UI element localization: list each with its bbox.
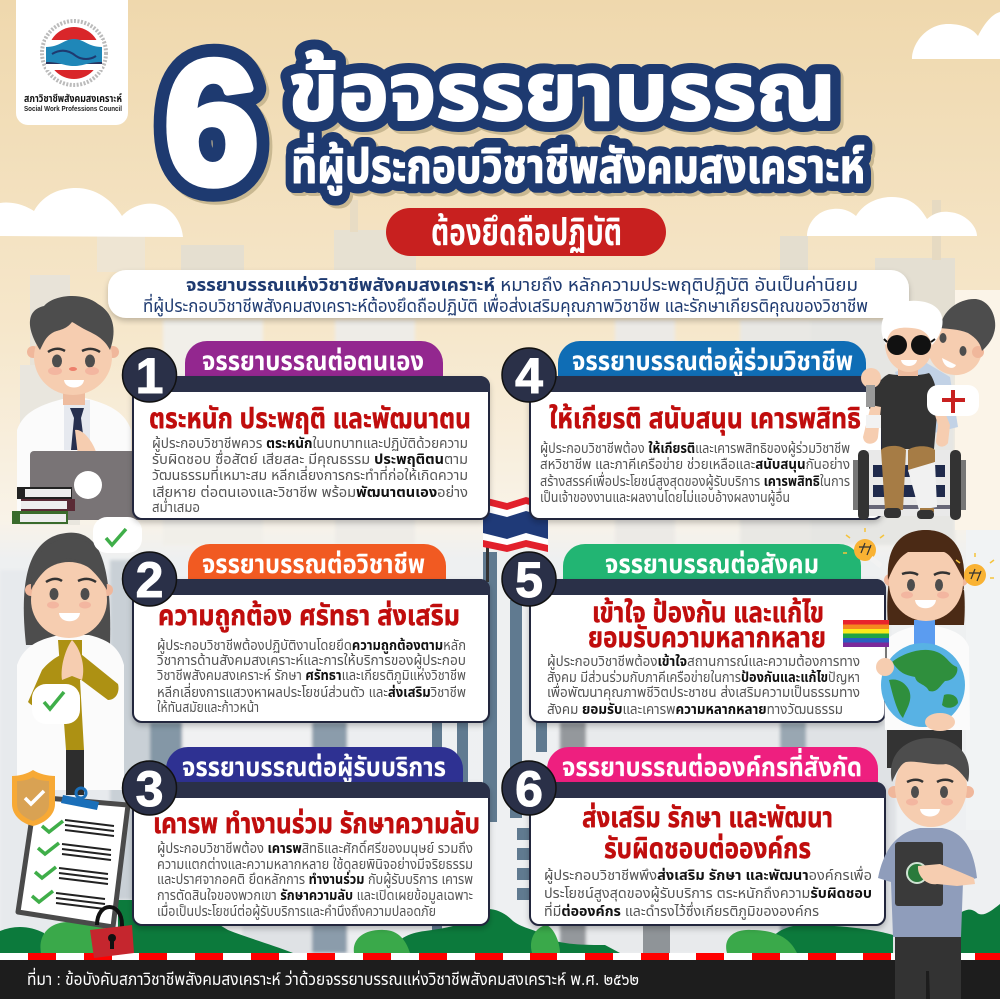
logo card: [16, 0, 128, 125]
tab heading: จรรยาบรรณต่อผู้รับบริการ: [182, 752, 446, 783]
wheelchair: [853, 460, 859, 510]
icon: medical cross badge: [927, 385, 979, 416]
icon: lightbulb left: [843, 528, 884, 566]
card text: สังคม ยอมรับและเคารพความหลากหลายทางวัฒนธรรม: [547, 701, 843, 717]
card text: ความแตกต่างและความหลากหลาย ใช้ดุลยพินิจอย่างมีจริยธรรม: [157, 856, 473, 873]
card 6: [502, 747, 886, 925]
intro line 1: จรรยาบรรณแห่งวิชาชีพสังคมสงเคราะห์ หมายถึง หลักความประพฤติปฏิบัติ อันเป็นค่านิยม: [186, 275, 858, 295]
tablet: [895, 842, 952, 906]
subtitle pill: [386, 208, 666, 256]
icon: shield: [12, 770, 55, 826]
tab heading: จรรยาบรรณต่อองค์กรที่สังกัด: [562, 748, 862, 782]
card text: สม่ำเสมอ: [152, 497, 200, 515]
card text: [547, 653, 860, 717]
tab heading: จรรยาบรรณต่อผู้ร่วมวิชาชีพ: [572, 346, 853, 377]
card title: ให้เกียรติ สนับสนุน เคารพสิทธิ: [549, 403, 861, 435]
card text: [157, 840, 473, 920]
card title line 1: ส่งเสริม รักษา และพัฒนา: [582, 802, 833, 833]
intro box: [108, 270, 909, 318]
card text: [544, 865, 872, 920]
card text: เสียหาย ต่อตนเองและวิชาชีพ พร้อม พัฒนาตนเองอย่าง: [152, 484, 468, 500]
source text: ที่มา : ข้อบังคับสภาวิชาชีพสังคมสงเคราะห์ ว่าด้วยจรรยาบรรณแห่งวิชาชีพสังคมสงเคราะห์ พ.ศ. ๒๕๖๒: [27, 967, 639, 989]
header bar: [530, 579, 886, 595]
clouds: [0, 12, 1000, 237]
icon: clipboard checklist: [18, 788, 128, 927]
caretaker: [895, 299, 995, 437]
title line 1 outline: ข้อจรรยาบรรณ: [288, 47, 836, 138]
card title: เคารพ ทำงานร่วม รักษาความลับ: [153, 808, 480, 839]
body panel: [133, 377, 489, 519]
card text: หลีกเลี่ยงการแสวงหาผลประโยชน์ส่วนตัว และส่งเสริมวิชาชีพ: [157, 682, 466, 700]
card text: รับผิดชอบ ซื่อสัตย์ เสียสละ มีคุณธรรม ประพฤติตนตาม: [152, 449, 468, 468]
tab heading: จรรยาบรรณต่อตนเอง: [202, 346, 424, 376]
body panel: [530, 580, 885, 722]
number badge: [122, 761, 176, 817]
tab: [166, 747, 463, 782]
card title line 1: เข้าใจ ป้องกัน และแก้ไข: [592, 597, 824, 628]
card text: เพื่อพัฒนาคุณภาพชีวิตประชาชน ส่งเสริมความเป็นธรรมทาง: [547, 682, 860, 701]
card text: เมื่อเป็นประโยชน์ต่อผู้รับบริการและคำนึงถึงความปลอดภัย: [157, 901, 436, 920]
body panel: [133, 783, 489, 925]
tab: [188, 544, 446, 579]
header bar: [133, 579, 490, 595]
header bar: [133, 782, 490, 798]
card text: สร้างสรรค์เพื่อประโยชน์สูงสุดของผู้รับบริการ เคารพสิทธิในการ: [540, 471, 850, 490]
card text: ผู้ประกอบวิชาชีพพึง ส่งเสริม รักษา และพัฒนา องค์กรเพื่อ: [544, 865, 872, 884]
number badge: [502, 552, 556, 608]
icon: check bubble lower: [32, 684, 80, 724]
arms: [863, 405, 881, 444]
footer source bar: [0, 953, 1000, 999]
person: old man in wheelchair with caretaker: [853, 299, 995, 520]
number badge: [122, 348, 176, 404]
number badge: [502, 348, 556, 404]
body panel: [133, 580, 489, 722]
tab: [185, 341, 443, 376]
number badge: 6: [515, 761, 543, 817]
card text: ผู้ประกอบวิชาชีพต้อง เคารพสิทธิและศักดิ์ศรีของมนุษย์ รวมถึง: [157, 840, 473, 857]
card text: [152, 435, 468, 515]
person: man with laptop: [12, 296, 147, 524]
number badge: 1: [136, 348, 163, 404]
number badge: [502, 761, 556, 817]
number badge: 2: [136, 552, 163, 608]
books: [12, 487, 75, 524]
header bar: [133, 376, 490, 392]
card title: ตระหนัก ประพฤติ และพัฒนาตน: [149, 403, 471, 434]
person: woman holding globe: [843, 528, 994, 768]
card text: ที่มีต่อองค์กร และดำรงไว้ซึ่งเกียรติภูมิขององค์กร: [544, 901, 819, 920]
card text: ผู้ประกอบวิชาชีพต้อง ให้เกียรติและเคารพสิทธิของผู้ร่วมวิชาชีพ: [540, 440, 850, 457]
icon: padlock: [90, 907, 134, 958]
card text: วิชาการด้านสังคมสงเคราะห์และการให้บริการของผู้ประกอบ: [156, 652, 466, 669]
card text: ผู้ประกอบวิชาชีพต้องเข้าใจสถานการณ์และความต้องการทาง: [547, 653, 860, 670]
card title: ความถูกต้อง ศรัทธา ส่งเสริม: [158, 600, 460, 633]
body panel: [530, 377, 882, 519]
card title line 2: รับผิดชอบต่อองค์กร: [604, 833, 811, 864]
number badge: 5: [515, 552, 543, 608]
card 1: [122, 341, 490, 519]
logo text Thai: สภาวิชาชีพสังคมสงเคราะห์: [24, 93, 122, 105]
card 4: [502, 341, 883, 519]
card text: และปราศจากอคติ ยึดหลักการ ทำงานร่วม กับผู้รับบริการ เคารพ: [157, 871, 473, 888]
title line 2 outline: ที่ผู้ประกอบวิชาชีพสังคมสงเคราะห์: [291, 133, 865, 196]
card text: วิชาชีพสังคมสงเคราะห์ รักษา ศรัทธาและเกียรติภูมิแห่งวิชาชีพ: [156, 667, 466, 684]
card text: สังคม มีส่วนร่วมกับภาคีเครือข่ายในการป้องกันและแก้ไขปัญหา: [547, 669, 860, 685]
card text: เป็นเจ้าของงานและผลงานโดยไม่แอบอ้างผลงานผู้อื่น: [540, 487, 790, 506]
icon: thai flag: [483, 497, 548, 582]
subtitle pill: ต้องยึดถือปฏิบัติ: [431, 212, 622, 253]
icon: lightbulb right: [956, 553, 994, 591]
tab heading: จรรยาบรรณต่อสังคม: [605, 549, 819, 579]
tab: [558, 341, 866, 376]
card title line 2: ยอมรับความหลากหลาย: [588, 622, 826, 653]
title line 2: ที่ผู้ประกอบวิชาชีพสังคมสงเคราะห์: [291, 133, 865, 196]
number badge: [122, 552, 176, 608]
card text: วัฒนธรรมที่เหมาะสม หลีกเลี่ยงการกระทำที่ก่อให้เกิดความ: [152, 465, 468, 483]
red and white dashes: [0, 953, 1000, 960]
header bar: [530, 782, 886, 798]
card 3: [122, 747, 490, 925]
tab: [563, 544, 861, 579]
laptop: [30, 451, 147, 520]
card text: การตัดสินใจของพวกเขา รักษาความลับ และเปิดเผยข้อมูลเฉพาะ: [157, 887, 473, 904]
icon: globe: [881, 643, 965, 727]
number badge: 4: [515, 348, 543, 404]
clip: [61, 795, 99, 810]
body panel: [530, 783, 885, 925]
card 2: [122, 544, 490, 722]
card text: ผู้ประกอบวิชาชีพต้องปฏิบัติงานโดยยึดความถูกต้องตามหลัก: [157, 637, 466, 655]
person: woman in namaste pose: [17, 517, 142, 795]
tab heading: จรรยาบรรณต่อวิชาชีพ: [202, 549, 425, 579]
icon: check bubble top: [93, 517, 142, 553]
card text: [156, 637, 466, 715]
card text: ประโยชน์สูงสุดของผู้รับบริการ ตระหนักถึงความ รับผิดชอบ: [544, 885, 872, 902]
head: [898, 362, 918, 376]
person: man with tablet: [878, 738, 977, 999]
title: [164, 26, 865, 221]
card text: ผู้ประกอบวิชาชีพควร ตระหนักในบทบาทและปฏิบัติด้วยความ: [152, 435, 468, 452]
intro line 2: ที่ผู้ประกอบวิชาชีพสังคมสงเคราะห์ต้องยึดถือปฏิบัติ เพื่อส่งเสริมคุณภาพวิชาชีพ และรักษาเกียรติคุณของวิชาชีพ: [143, 293, 868, 318]
big number 6 outline: 6: [164, 26, 259, 221]
number badge: 3: [136, 761, 163, 817]
body: [869, 373, 938, 449]
icon: rainbow flag: [843, 620, 889, 667]
card text: [540, 440, 850, 506]
title line 1: ข้อจรรยาบรรณ: [288, 47, 836, 138]
card text: ให้ทันสมัยและก้าวหน้า: [157, 699, 259, 715]
logo text English: Social Work Professions Council: [24, 104, 122, 113]
card 5: [502, 544, 886, 722]
big number 6: 6: [164, 26, 259, 221]
tab: [547, 747, 878, 782]
greenery: [0, 900, 1000, 953]
header bar: [530, 376, 883, 392]
icon: council logo: [42, 21, 106, 85]
card text: สหวิชาชีพ และภาคีเครือข่าย ช่วยเหลือและสนับสนุนกันอย่าง: [540, 456, 850, 473]
